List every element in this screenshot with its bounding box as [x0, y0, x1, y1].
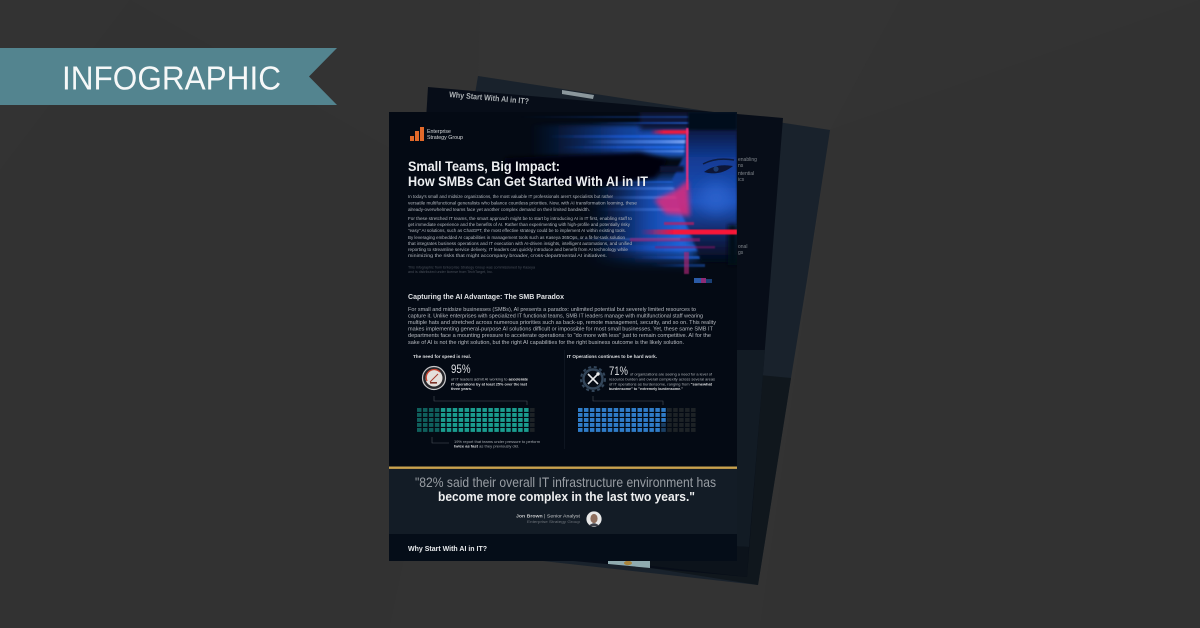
section body text: capture it. Unlike enterprises with specialized IT functional teams, SMB IT leaders manage with multifunctional staff wearing [408, 314, 703, 320]
attribution [516, 514, 581, 524]
panel: IT operations [567, 354, 715, 433]
intro text: For these stretched IT teams, the smart approach might be to start by introducing AI in IT first, enabling staff to [408, 216, 632, 222]
front page [389, 112, 737, 561]
callout: 19%: 19% report that teams under pressure to perform [454, 439, 540, 444]
intro text: versatile multifunctional generalists who balance countless priorities. Now, with AI transformation looming, these [408, 200, 637, 206]
intro text: reporting to streamline service delivery, IT leaders can quickly introduce and benefit from AI technology while [408, 247, 628, 253]
intro text: minimizing the risks that might accompany broader, cross-departmental AI initiatives. [408, 253, 607, 259]
banner label: INFOGRAPHIC [62, 60, 281, 96]
stat: 95%: 95% [451, 362, 471, 376]
intro text: By leveraging embedded AI capabilities in management tools such as Kaseya 365Ops, or a fit-for-task solution [408, 235, 625, 241]
logo: Enterprise [427, 129, 451, 135]
panel heading: IT Operations continues to be hard work. [567, 354, 657, 360]
attribution: Jon Brown | Senior Analyst [516, 514, 581, 518]
icon: gear with tools [581, 367, 605, 391]
quote panel: become more complex in the last two years." [438, 490, 695, 504]
bracket arrow [432, 437, 449, 443]
stat description: of organizations are seeing a need for a level of [630, 372, 713, 376]
title: Small Teams, Big Impact: [408, 158, 560, 174]
waffle chart: 95 percent [417, 408, 536, 433]
bracket arrow [593, 396, 663, 405]
title: How SMBs Can Get Started With AI in IT [408, 173, 648, 189]
intro text: get immediate experience and the benefits of AI. Rather than experimenting with high-profile and potentially risky [408, 222, 631, 228]
portrait [586, 511, 602, 527]
section body text: sake of AI is not the right solution, but the right AI capabilities for the right business outcome is the likely solution. [408, 340, 684, 346]
stat description [609, 372, 715, 391]
face [672, 128, 737, 262]
logo [410, 127, 463, 141]
lower glitch fragments [684, 252, 689, 274]
stat description: IT operations by at least 25% over the last [451, 382, 528, 386]
pale strip at top of sheet [562, 90, 594, 99]
section body text: multiple hats and stretched across numerous priorities such as back-up, remote management, security, and so on. This reality [408, 320, 716, 326]
bottom band heading: Why Start With AI in IT? [408, 544, 487, 553]
fine print [408, 266, 535, 274]
intro text [408, 194, 637, 259]
back page heading: Why Start With AI in IT? [449, 90, 529, 106]
banner ribbon [0, 48, 337, 105]
back page text fragments: ns [738, 163, 744, 169]
back page text fragments: onal [738, 244, 747, 250]
panel heading: The need for speed is real. [413, 354, 471, 360]
back page: lighter sheet [400, 76, 830, 585]
callout: 19%: twice as fast as they previously did. [454, 444, 519, 448]
icon: speedometer [422, 366, 446, 390]
quote panel [389, 469, 737, 534]
hero image: glitched face [505, 112, 737, 283]
stat description: three years. [451, 386, 472, 391]
back page text fragments: ntential [738, 171, 754, 177]
panel: need for speed [413, 354, 540, 448]
back page text fragments: ics [738, 177, 745, 183]
back page text fragments: enabling [738, 157, 757, 163]
callout: 19% [454, 439, 540, 448]
section body text: For small and midsize businesses (SMBs), AI presents a paradox: unlimited potential but severely limited resources to [408, 307, 696, 313]
pale strip at bottom of sheet [608, 561, 650, 568]
stat: 71%: 71% [609, 364, 628, 378]
intro text: already-overwhelmed teams face yet another complex demand on their limited bandwidth. [408, 207, 590, 213]
intro text: that integrates business operations and IT execution with AI-driven insights, intelligent automations, and unified [408, 241, 632, 247]
pink glitch lines [650, 130, 688, 134]
red streak [640, 230, 737, 234]
dark wedge behind title [505, 152, 668, 186]
bracket arrow [434, 396, 527, 405]
section heading: Capturing the AI Advantage: The SMB Paradox [408, 292, 565, 301]
gold rule [389, 466, 737, 469]
fine streaks [520, 116, 690, 118]
stat description: of IT leaders admit AI working to accelerate [451, 376, 529, 382]
section body text: makes implementing general-purpose AI solutions difficult or impossible for most small businesses. Yet, these same SMB IT [408, 326, 714, 332]
quote text: "82% said their overall IT infrastructure environment has [415, 475, 716, 490]
logo: Strategy Group [427, 135, 463, 141]
eye [703, 159, 734, 173]
title [408, 158, 648, 189]
back page text fragments: gs [738, 250, 744, 256]
back page: darker sheet [400, 87, 783, 577]
section body text: departments face a mounting pressure to accelerate operations: to "do more with less" just to remain competitive. AI for the [408, 333, 711, 339]
fine print: and is distributed under license from TechTarget, Inc. [408, 270, 493, 274]
section body text [408, 307, 716, 346]
attribution: Enterprise Strategy Group [527, 520, 580, 524]
bottom band heading [389, 534, 737, 561]
stat description [451, 376, 529, 391]
back page text fragments [738, 157, 757, 256]
stat description: resource burden and overall complexity across several areas [609, 376, 715, 382]
waffle chart: 71 percent [578, 408, 697, 433]
stat description: of IT operations as burdensome, ranging from "somewhat [609, 382, 713, 386]
broad blue glow [530, 125, 695, 157]
stat description: burdensome" to "extremely burdensome." [609, 386, 683, 391]
intro text: In today's small and midsize organizations, the most valuable IT professionals aren't specialists but rather [408, 194, 613, 200]
fine print: This infographic from Enterprise Strategy Group was commissioned by Kaseya [408, 266, 535, 270]
divider [564, 350, 566, 449]
intro text: "easy" AI solutions, such as ChatGPT, the most effective strategy could be to implement AI within existing tools. [408, 228, 626, 234]
